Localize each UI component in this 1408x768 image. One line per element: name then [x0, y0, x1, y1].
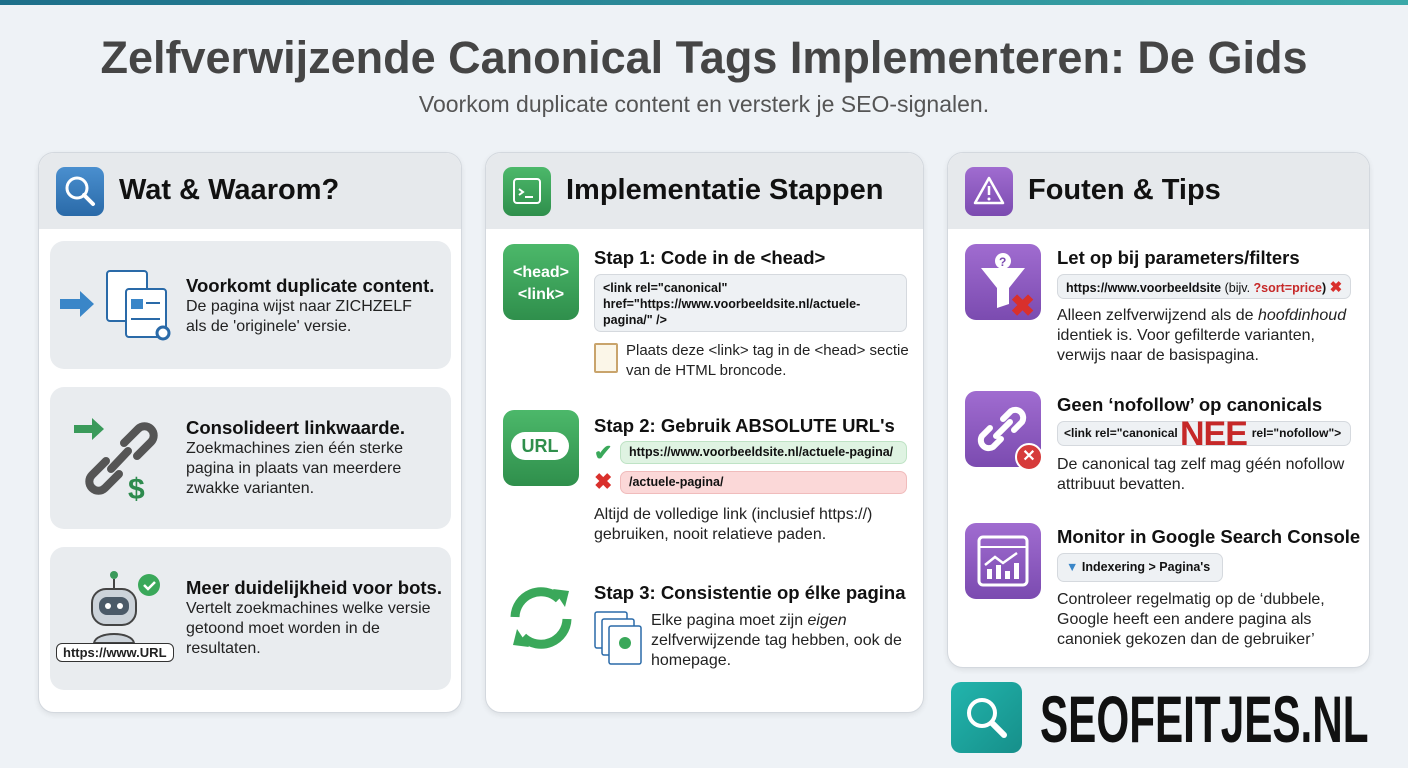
step 3: Elke pagina moet zijn eigen: [651, 612, 847, 629]
code box: href="https://www.voorbeeldsite.nl/actuele-: [603, 297, 860, 311]
step 2: https://www.voorbeeldsite.nl/actuele-pagina/: [629, 445, 893, 459]
card: linkwaarde: [50, 387, 451, 529]
step 2: gebruiken, nooit relatieve paden.: [594, 526, 826, 543]
icon: head link: <link>: [518, 286, 564, 303]
text: duplicate content: De pagina wijst naar ZICHZELF: [186, 298, 412, 315]
tip 1: identiek is. Voor gefilterde varianten,: [1057, 327, 1315, 344]
step 2: [503, 410, 907, 543]
card: bots: [50, 547, 451, 690]
logo: [951, 682, 1369, 756]
text: linkwaarde: zwakke varianten.: [186, 480, 314, 497]
panel: implementatie stappen: [485, 152, 924, 713]
tip 2: [965, 391, 1351, 493]
tip 3: Monitor in Google Search Console: [1057, 526, 1360, 547]
header: implementatie: [486, 153, 923, 229]
text: linkwaarde: pagina in plaats van meerdere: [186, 460, 401, 477]
icon: warning: [965, 167, 1013, 216]
icon: link broken: [965, 391, 1041, 467]
panel: fouten & tips: [947, 152, 1370, 668]
step 1: van de HTML broncode.: [626, 362, 786, 379]
icon: notepad: [594, 343, 618, 373]
subtitle: Voorkom duplicate content en versterk je SEO-signalen.: [419, 91, 989, 117]
tip 1: Alleen zelfverwijzend als de hoofdinhoud: [1057, 307, 1346, 324]
code box: <link rel="canonical": [603, 281, 727, 295]
header: wat & waarom: [39, 153, 461, 229]
tip 3: [965, 523, 1360, 648]
tip 3: canoniek gekozen dan de gebruiker’: [1057, 631, 1315, 648]
step 3: [510, 582, 906, 669]
tip 3: Google heeft een andere pagina als: [1057, 611, 1311, 628]
step 2: /actuele-pagina/: [629, 475, 723, 489]
text: bots: resultaten.: [186, 640, 261, 657]
panel: wat & waarom: [38, 152, 462, 713]
icon: filter: [965, 244, 1041, 320]
tip 2: <link rel="canonical rel="nofollow">: [1064, 426, 1341, 440]
tip 1: Let op bij parameters/filters: [1057, 247, 1300, 268]
icon: filter: ?: [999, 255, 1006, 269]
title: Zelfverwijzende Canonical Tags Implementeren: De Gids: [100, 32, 1307, 83]
code box: pagina/" />: [603, 313, 667, 327]
text: duplicate content: Voorkomt duplicate content.: [186, 275, 434, 296]
header: implementatie: Implementatie Stappen: [566, 174, 883, 206]
icon: url: [503, 410, 579, 486]
step 1: [503, 244, 909, 379]
step 2: Altijd de volledige link (inclusief https://): [594, 506, 872, 523]
icon: chain: [74, 418, 158, 503]
tip 2: attribuut bevatten.: [1057, 476, 1185, 493]
icon: head link: [503, 244, 579, 320]
tip 2: NEE: [1180, 415, 1247, 453]
code box: [594, 274, 907, 332]
text: linkwaarde: Consolideert linkwaarde.: [186, 417, 405, 438]
card: duplicate content: [50, 241, 451, 369]
tip 2: Geen ‘nofollow’ op canonicals: [1057, 394, 1322, 415]
tip 2: De canonical tag zelf mag géén nofollow: [1057, 456, 1344, 473]
tip 1: [965, 244, 1351, 364]
step 3: zelfverwijzende tag hebben, ook de: [651, 632, 902, 649]
tip 2: ✕: [1022, 448, 1036, 465]
icon: refresh: [510, 587, 572, 649]
tip 1: verwijs naar de basispagina.: [1057, 347, 1259, 364]
text: duplicate content: als de 'originele' versie.: [186, 318, 351, 335]
tip 1: https://www.voorbeeldsite (bijv. ?sort=price) ✖: [1066, 279, 1342, 296]
icon: chart: [965, 523, 1041, 599]
step 1: Stap 1: Code in de <head>: [594, 247, 825, 268]
step 2: Stap 2: Gebruik ABSOLUTE URL's: [594, 415, 895, 436]
tip 3: ▼ Indexering > Pagina's: [1066, 560, 1210, 574]
icon: magnifier: [56, 167, 104, 216]
icon: robot: [91, 571, 160, 643]
bad url: ✖: [594, 469, 612, 494]
step 3: Stap 3: Consistentie op élke pagina: [594, 582, 905, 603]
icon: head link: <head>: [513, 264, 569, 281]
header: fouten: [948, 153, 1369, 229]
tip 3: Controleer regelmatig op de ‘dubbele,: [1057, 591, 1325, 608]
url label: [56, 643, 174, 662]
text: linkwaarde: [186, 417, 405, 497]
icon: pages arrow: [60, 270, 170, 340]
text: duplicate content: [186, 275, 434, 335]
tip 1: ✖: [1010, 290, 1035, 323]
text: bots: getoond moet worden in de: [186, 620, 380, 637]
logo text: SEOFEITJES.NL: [1040, 682, 1369, 756]
text: linkwaarde: Zoekmachines zien één sterke: [186, 440, 403, 457]
url label: https://www.URL: [63, 645, 167, 660]
text: bots: [186, 577, 442, 657]
icon: url: URL: [522, 436, 558, 456]
text: bots: Meer duidelijkheid voor bots.: [186, 577, 442, 598]
header: fouten: Fouten & Tips: [1028, 174, 1221, 206]
step 1: Plaats deze <link> tag in de <head> sectie: [626, 342, 909, 359]
good url: ✔: [594, 440, 612, 465]
text: bots: Vertelt zoekmachines welke versie: [186, 600, 431, 617]
step 3: homepage.: [651, 652, 731, 669]
icon: logo magnifier: [951, 682, 1022, 753]
header: wat & waarom: Wat & Waarom?: [119, 174, 339, 206]
icon: pages check: [594, 611, 642, 665]
icon: terminal: [503, 167, 551, 216]
